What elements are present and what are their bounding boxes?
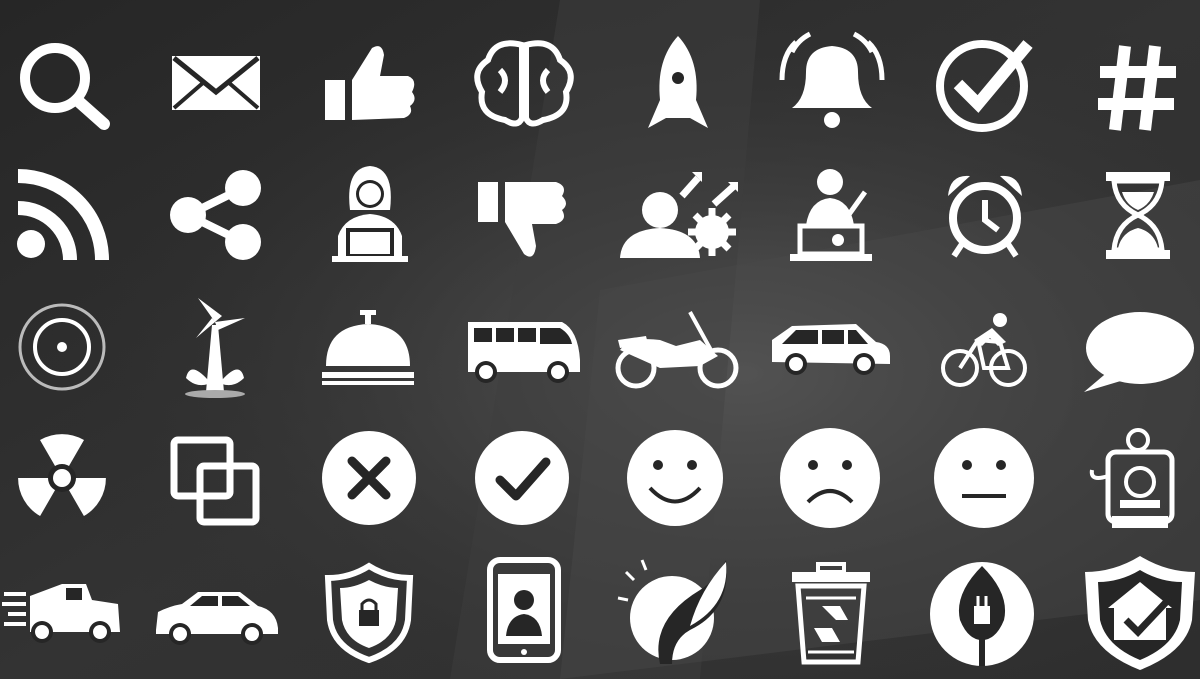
icon: person drawing — [790, 169, 872, 261]
icon: shield lock — [328, 566, 410, 660]
icon: person with gears — [620, 172, 738, 258]
icon: alarm clock — [948, 176, 1022, 256]
icon: ev charging pump — [1092, 430, 1172, 528]
icon: rocket — [648, 36, 708, 128]
icon: car — [156, 592, 278, 645]
icon: envelope — [172, 56, 260, 110]
icon: service bell — [322, 310, 414, 385]
icon: brain — [477, 43, 571, 124]
icon: frown — [780, 428, 880, 528]
icon: wind turbine plant — [185, 298, 245, 398]
icon: hourglass — [1106, 172, 1170, 259]
icon: bell — [782, 34, 882, 128]
icon: shield house — [1085, 556, 1195, 670]
icon: target — [20, 305, 104, 389]
icon: share — [170, 170, 261, 260]
icon: leaf plug circle — [930, 562, 1034, 666]
icon: radiation — [13, 434, 111, 519]
icon: speech bubble — [1084, 312, 1194, 392]
icon: van — [468, 322, 580, 383]
icon: recycle bin — [792, 564, 870, 662]
icon: thumbs up — [325, 46, 415, 120]
icon: phone profile — [490, 560, 558, 660]
icon: smile — [627, 430, 723, 526]
icon: woman with laptop — [332, 166, 408, 262]
icon: earth leaf — [618, 560, 727, 664]
icon: x circle — [322, 431, 416, 525]
icon: neutral face — [934, 428, 1034, 528]
icon: bicycle — [943, 313, 1025, 385]
icon: SUV — [772, 324, 890, 375]
icon: rss — [17, 176, 102, 260]
icon: check circle — [475, 431, 569, 525]
icon: magnifier — [25, 48, 104, 124]
icon: thumbs down — [478, 182, 566, 257]
icon: copy squares — [174, 440, 256, 522]
icon: check in circle — [940, 44, 1028, 128]
icon: speeding truck — [2, 584, 120, 643]
icon: motorcycle — [618, 312, 736, 386]
icon: hash — [1098, 46, 1176, 130]
